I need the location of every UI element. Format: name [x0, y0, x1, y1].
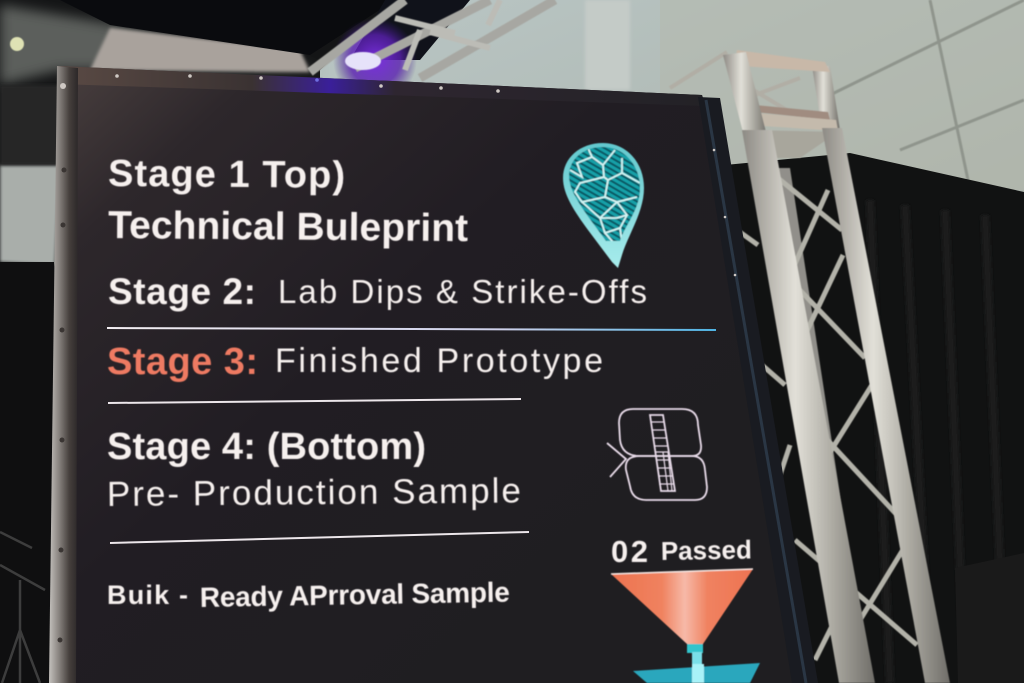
black curtain [725, 153, 1024, 683]
microphone stand at left [0, 532, 45, 683]
aluminium truss tower [670, 50, 950, 683]
label: 02 Passed: Passed [661, 534, 752, 566]
heading: Stage 1 Top: Stage 1 Top) [108, 153, 345, 197]
bulk approval text: Ready APrroval Sample [200, 577, 510, 613]
label: 02 Passed: 02 [611, 534, 648, 569]
divider three [110, 531, 529, 544]
stage 2 line [108, 271, 647, 312]
bulk approval text: Buik - [107, 580, 188, 610]
stage 4 line: Pre- Production Sample [107, 471, 521, 514]
board right hem [698, 97, 818, 683]
stage 4 line: Stage 4: (Bottom) [107, 426, 426, 468]
stage 2 line: Stage 2: [108, 271, 256, 312]
icon: garment pattern outline [607, 409, 707, 500]
icon: teal location pin with mesh [563, 143, 644, 268]
heading: Stage 1 Top: Technical Buleprint [108, 204, 468, 250]
stage 3 line: Finished Prototype [275, 342, 603, 380]
upper truss with purple light [310, 0, 555, 102]
board left silver strip [49, 66, 78, 683]
stage 4 line [107, 426, 521, 514]
board top hem [58, 66, 706, 106]
grommets [58, 74, 736, 642]
divider one [107, 327, 716, 331]
divider two [108, 398, 521, 404]
stage 2 line: Lab Dips & Strike-Offs [278, 273, 647, 310]
sign board [49, 66, 818, 683]
heading: Stage 1 Top [108, 153, 468, 250]
stage 3 line [107, 341, 603, 383]
funnel graphic [611, 569, 760, 683]
stage 3 line: Stage 3: [107, 341, 258, 383]
label: 02 Passed [611, 534, 752, 569]
